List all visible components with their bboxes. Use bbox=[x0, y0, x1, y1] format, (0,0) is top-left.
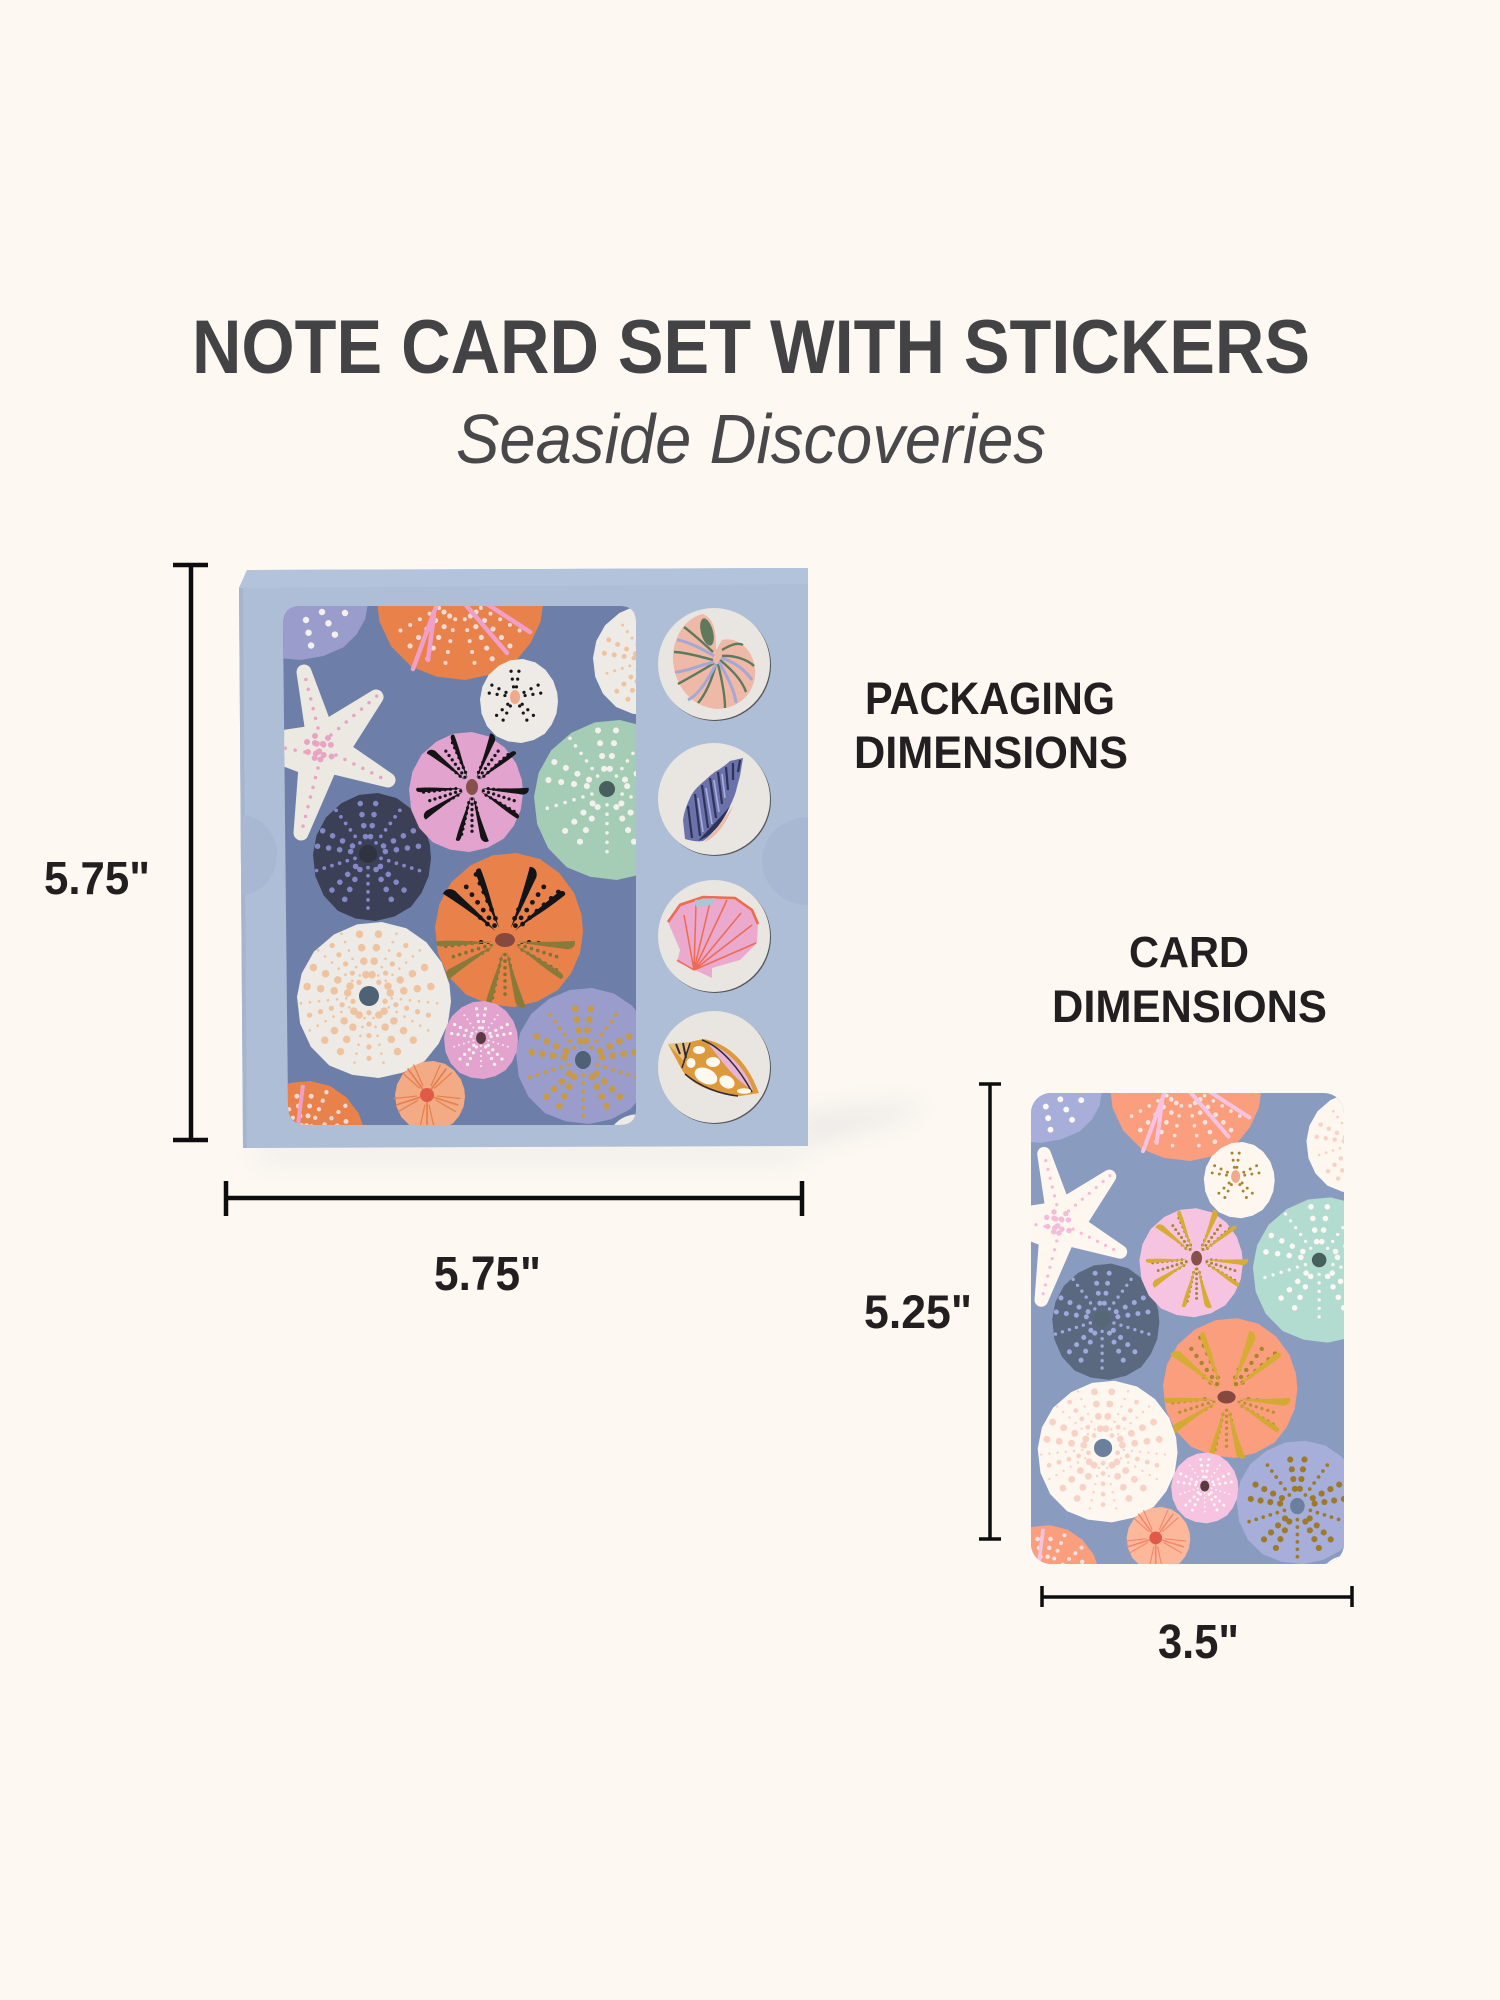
box body bbox=[239, 568, 808, 1148]
urchin: cream corner bbox=[610, 1114, 670, 1158]
note card bbox=[1031, 1093, 1344, 1564]
packaging box bbox=[239, 568, 808, 1148]
starfish bbox=[280, 672, 388, 834]
card dimensions label: DIMENSIONS bbox=[1052, 981, 1327, 1032]
urchin: lilac low bbox=[516, 988, 654, 1124]
card height dimension: 5.25" bbox=[864, 1285, 972, 1338]
sticker: blue conch shell bbox=[658, 743, 771, 856]
shadow under box bbox=[255, 1102, 920, 1160]
title: NOTE CARD SET WITH STICKERS bbox=[192, 305, 1310, 390]
packaging width dimension bbox=[226, 1181, 802, 1301]
urchin: big white bbox=[297, 922, 451, 1078]
thumb notches bbox=[240, 830, 241, 862]
card in window bbox=[283, 606, 636, 1125]
card dimensions label: CARD bbox=[1129, 928, 1249, 977]
card width dimension bbox=[1042, 1586, 1352, 1669]
card width dimension: 3.5" bbox=[1158, 1616, 1239, 1669]
packaging dimensions label: DIMENSIONS bbox=[854, 727, 1128, 778]
urchin: lilac corner bbox=[224, 544, 368, 660]
urchin: navy bbox=[312, 793, 431, 921]
packaging width dimension: 5.75" bbox=[434, 1248, 541, 1301]
packaging height dimension: 5.75" bbox=[44, 852, 150, 904]
sticker: nautilus shell bbox=[658, 608, 771, 721]
sticker: pink scallop shell bbox=[658, 880, 771, 993]
urchin: mint bbox=[534, 720, 690, 880]
urchin: orange bottom left bbox=[242, 1081, 366, 1205]
packaging dimensions label: PACKAGING bbox=[865, 673, 1115, 724]
card dimensions label bbox=[1052, 928, 1327, 1032]
urchin: orange top bbox=[376, 512, 544, 680]
packaging dimensions label bbox=[854, 673, 1128, 778]
urchin: pink with rays bbox=[409, 732, 529, 852]
sticker: orange volute shell bbox=[658, 1011, 771, 1124]
urchin: orange main bbox=[430, 853, 583, 1014]
packaging height dimension bbox=[44, 565, 208, 1140]
urchin: cream top right bbox=[593, 604, 703, 716]
subtitle: Seaside Discoveries bbox=[456, 400, 1046, 478]
card height dimension bbox=[864, 1084, 1001, 1539]
card background bbox=[270, 590, 650, 1140]
urchin: small white bbox=[480, 659, 558, 743]
urchin: small pink bbox=[444, 1001, 518, 1079]
urchin: peach bbox=[394, 1061, 465, 1131]
